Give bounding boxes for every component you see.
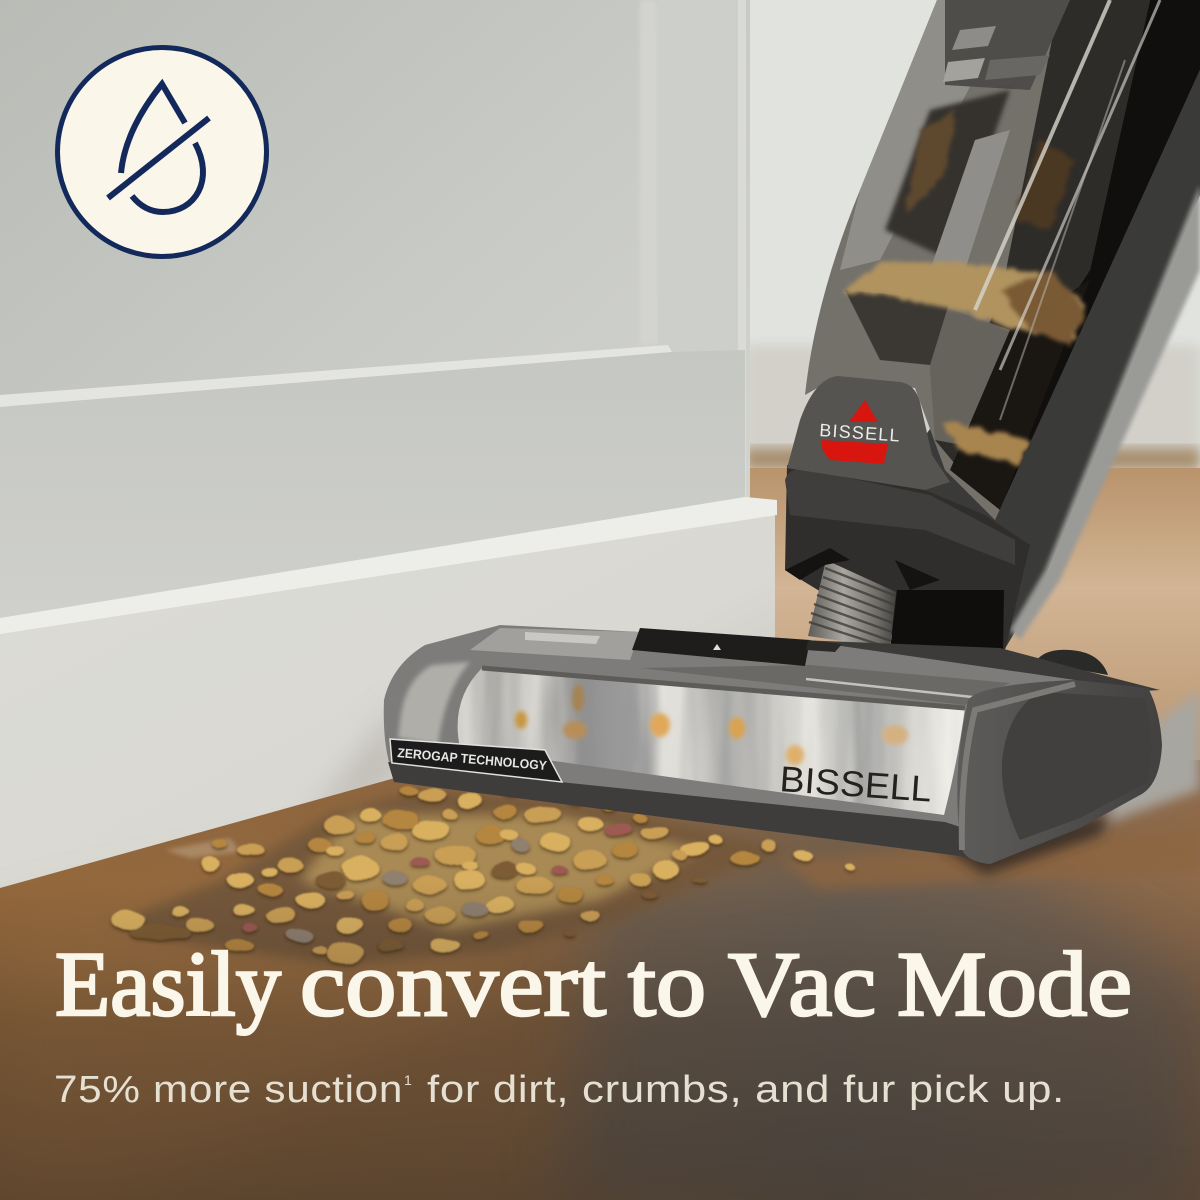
- cleaning head: [384, 625, 1162, 864]
- clear housing: [384, 625, 1075, 860]
- brush roller: [458, 666, 966, 815]
- subtitle: for dirt, crumbs, and fur pick up.: [427, 1069, 1065, 1111]
- zerogap label: [390, 739, 562, 782]
- dirt tank: [790, 0, 1200, 530]
- subtitle: 75% more suction: [54, 1069, 403, 1111]
- base strip: [388, 762, 985, 862]
- vacuum upper body: [785, 0, 1200, 652]
- zerogap label: ZEROGAP TECHNOLOGY: [397, 745, 548, 773]
- icon: crossed-out water drop badge: [58, 48, 266, 256]
- wood floor: [0, 690, 1200, 1200]
- crumb pile: [110, 784, 856, 965]
- title: convert: [300, 933, 606, 1035]
- control pedal: [632, 628, 810, 666]
- title: Vac: [728, 933, 876, 1035]
- baseboard: [0, 497, 777, 888]
- neck: [785, 465, 1030, 650]
- white wall panel: [0, 0, 750, 640]
- title: Mode: [897, 933, 1132, 1035]
- end cap: [957, 680, 1162, 864]
- logo cap: [787, 376, 950, 490]
- left roller section: [398, 662, 470, 745]
- logo cap: BISSELL: [819, 420, 901, 446]
- subtitle: 1: [404, 1072, 412, 1088]
- title: Easily: [55, 933, 281, 1035]
- rear wheel: [1035, 650, 1108, 675]
- bottom gradient overlay: [0, 880, 1200, 1200]
- hose: [808, 560, 896, 648]
- subtitle: [54, 1069, 1065, 1111]
- title: to: [628, 933, 706, 1035]
- bissell roller logo: BISSELL: [778, 758, 933, 810]
